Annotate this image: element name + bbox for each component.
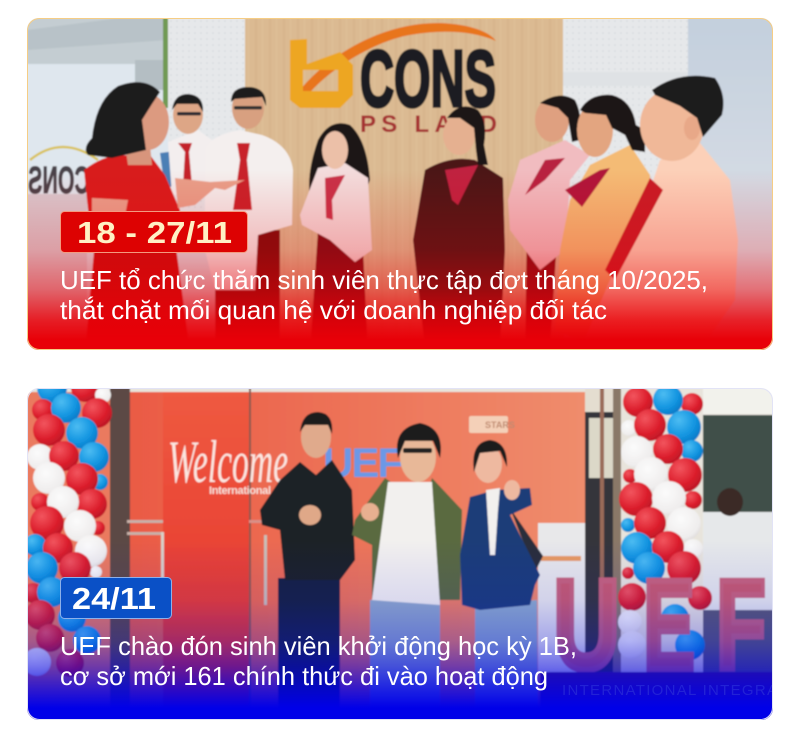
headline 2: cơ sở mới 161 chính thức đi vào hoạt động <box>60 661 548 691</box>
card 2 photo: students at new campus <box>23 373 773 720</box>
logo b mark <box>290 39 353 108</box>
girl with long hair <box>300 123 372 350</box>
balloon column right <box>618 385 712 660</box>
card 1 border <box>28 18 772 350</box>
woman in red blouse <box>84 82 245 350</box>
logo swoosh <box>302 22 496 92</box>
big standee letters UEF: E <box>643 554 695 697</box>
headline 2: UEF chào đón sinh viên khởi động học kỳ 1B, <box>60 631 577 661</box>
date badge: 24/11: 24/11 <box>72 581 156 616</box>
woman in pink shirt <box>508 96 590 350</box>
stars logo sign: STARS <box>485 420 515 430</box>
big standee letters UEF: F <box>716 554 766 697</box>
international caption: International <box>209 485 271 497</box>
man with red tie <box>205 87 293 350</box>
card 2 border <box>28 388 772 720</box>
date badge: 18 - 27/11 <box>60 212 248 252</box>
base caption: international integration: INTERNATIONAL INTEGRA <box>562 682 777 699</box>
tall boy in black jacket <box>260 412 355 720</box>
headline 1: UEF tổ chức thăm sinh viên thực tập đợt tháng 10/2025, <box>60 265 708 295</box>
logo wordmark: CONS <box>360 34 496 123</box>
woman in orange shirt <box>558 94 651 330</box>
blue gradient overlay <box>27 561 773 720</box>
headline 1 <box>60 265 708 325</box>
card: internship visit <box>27 18 773 350</box>
man with glasses, back <box>160 94 216 195</box>
welcome script: Welcome <box>168 429 288 495</box>
headline 1: thắt chặt mối quan hệ với doanh nghiệp đối tác <box>60 295 607 325</box>
headline 2 <box>60 631 577 691</box>
boy in olive jacket <box>352 423 462 720</box>
woman in maroon robe <box>413 106 505 350</box>
logo sub-wordmark: PS LAND <box>360 111 497 138</box>
door handles <box>127 520 285 605</box>
stars logo sign <box>469 416 515 433</box>
mirrored sign <box>28 147 98 202</box>
wall UEF wordmark: UEF <box>323 439 403 486</box>
big standee letters UEF: U <box>553 554 620 697</box>
card: semester welcome <box>23 373 777 720</box>
date badge: 24/11 <box>60 578 172 618</box>
card 1 photo: people at Bcons office <box>27 18 773 350</box>
red gradient overlay <box>27 170 773 350</box>
man in salmon shirt <box>594 74 738 323</box>
date badge: 18 - 27/11: 18 - 27/11 <box>77 215 232 250</box>
girl in navy cardigan <box>460 440 543 720</box>
stage base <box>540 672 773 720</box>
balloon column left <box>23 373 112 677</box>
big standee letters UEF <box>556 576 766 674</box>
